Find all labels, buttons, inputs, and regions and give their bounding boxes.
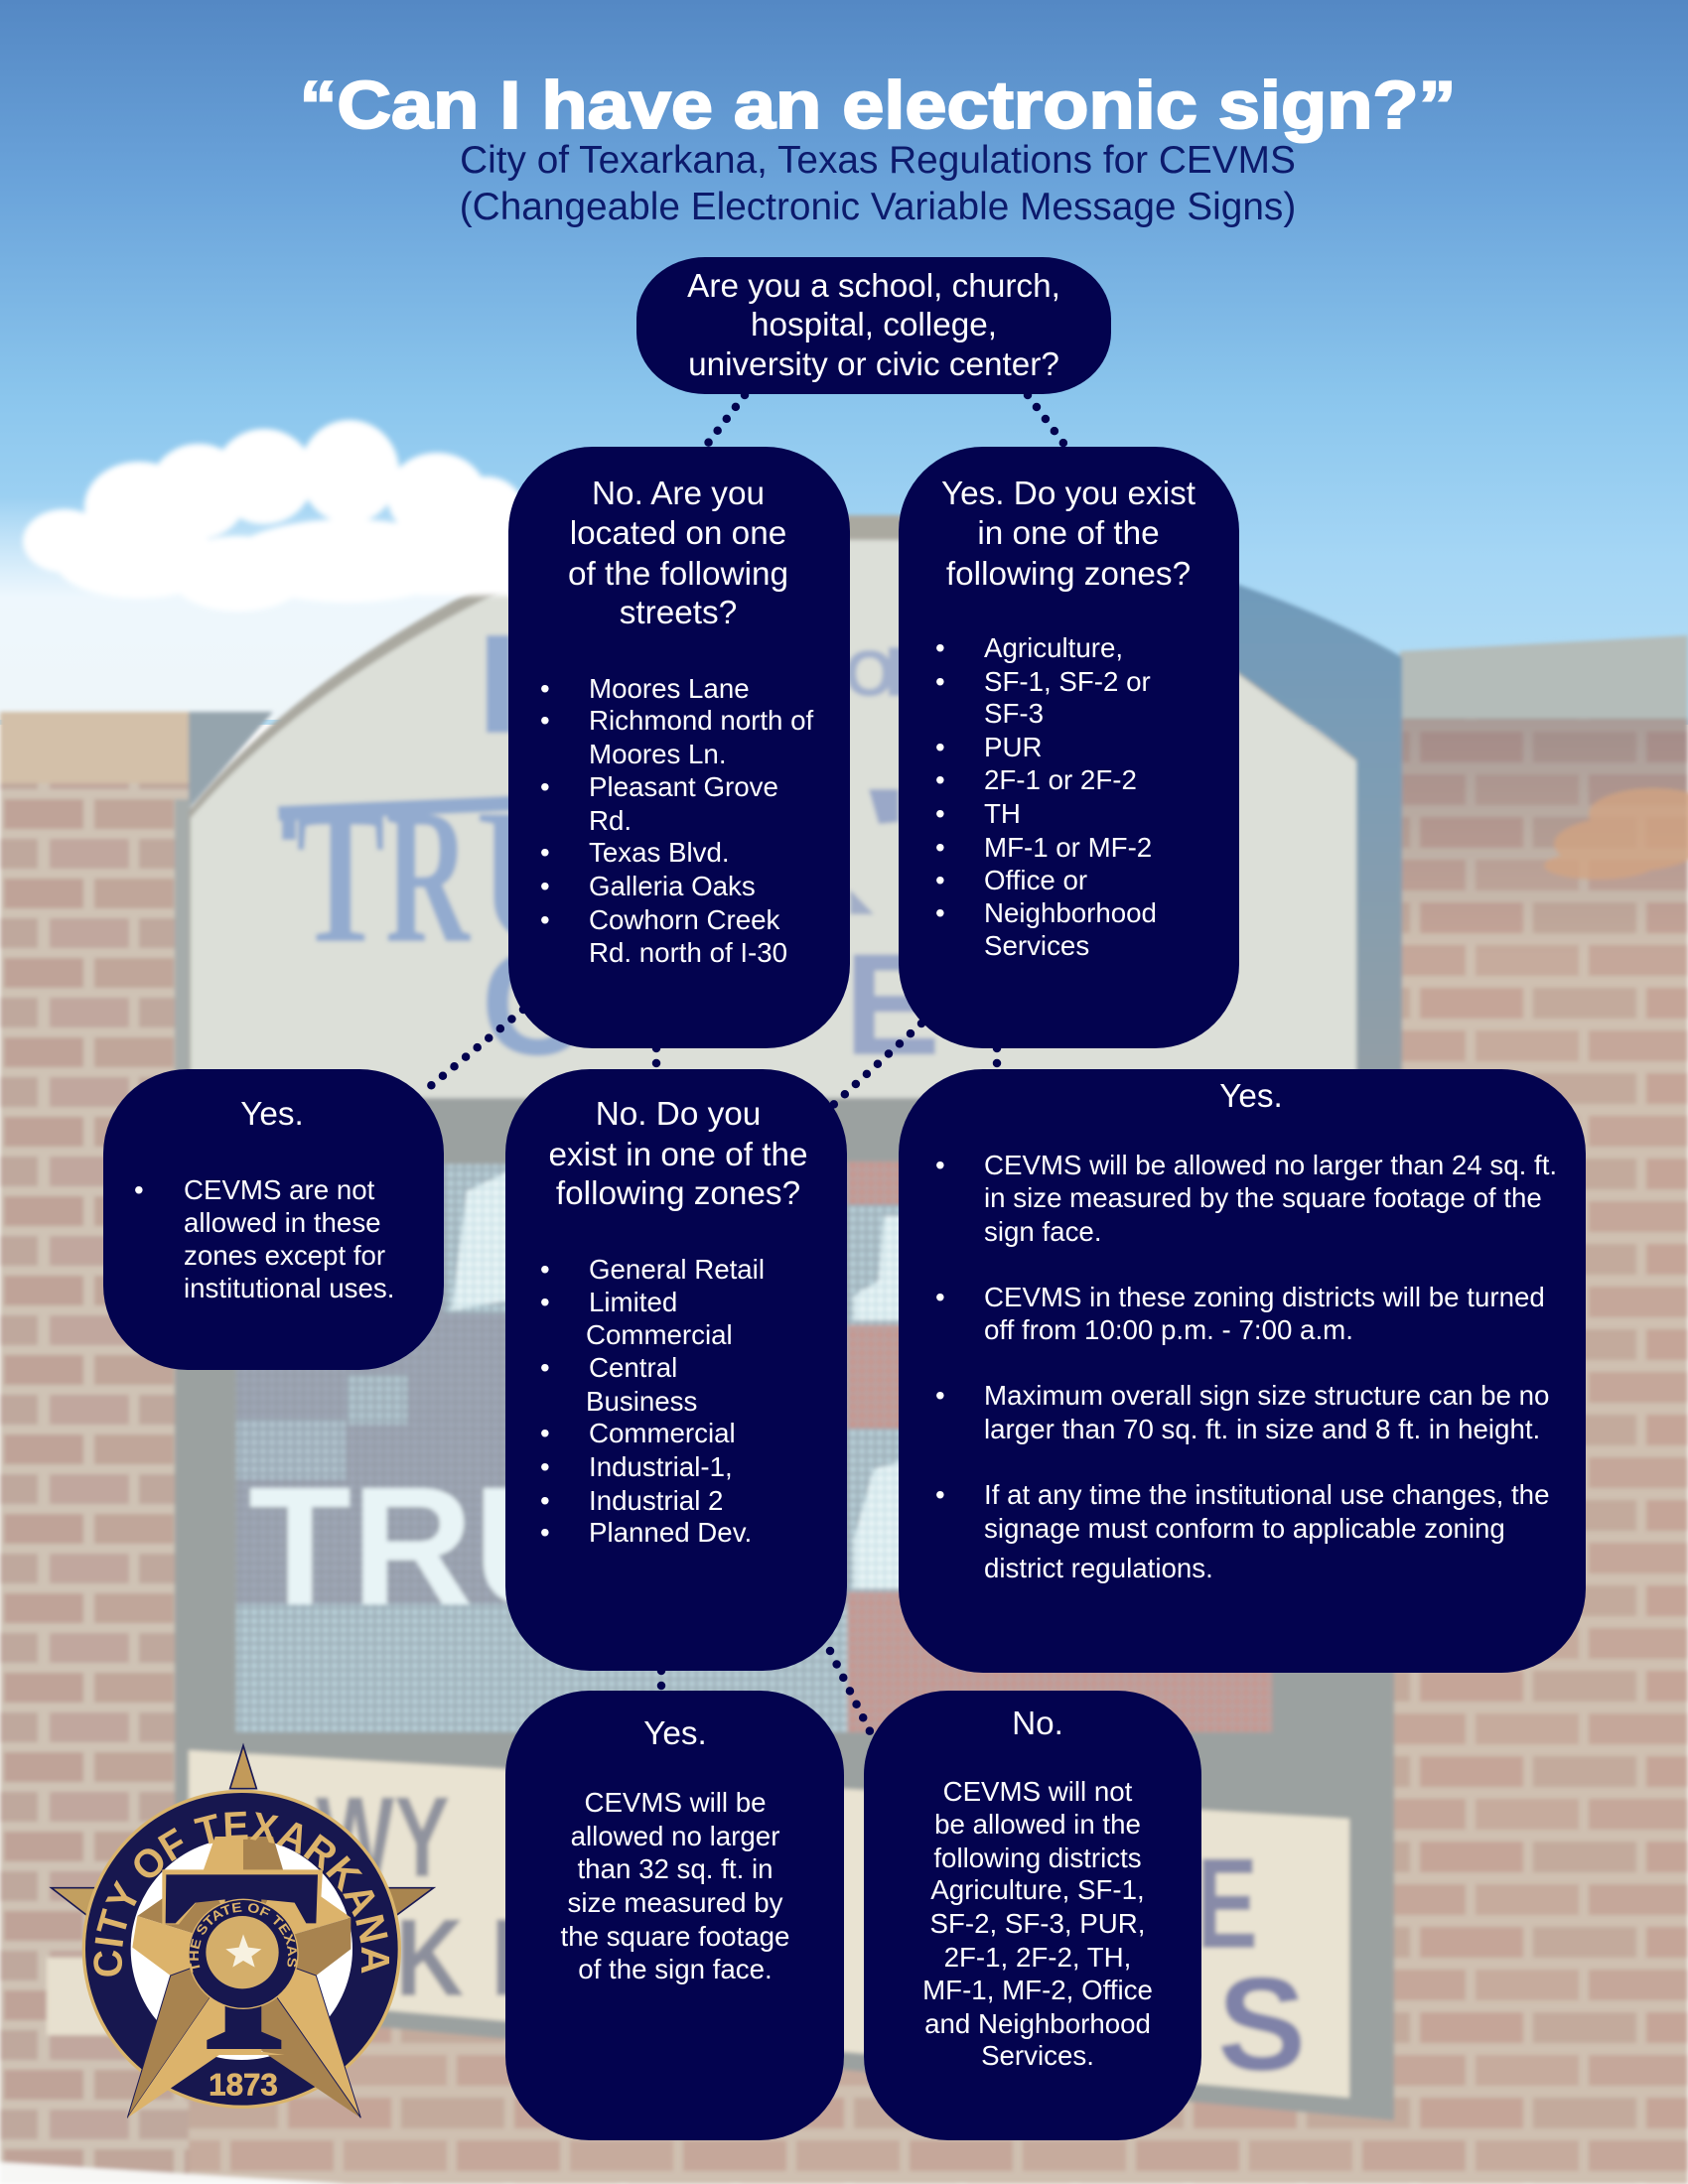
panel: yes, 32 sq ft: of the sign face. [578, 1954, 773, 1984]
panel: yes, not allowed: allowed in these [184, 1207, 381, 1238]
panel: yes, zone question: Yes. Do you exist [941, 476, 1196, 512]
panel: no, not allowed districts: Services. [981, 2040, 1094, 2071]
background photo: sky and sign building: WY [316, 1774, 450, 1901]
panel: yes, 32 sq ft: Yes. [643, 1715, 707, 1752]
panel: yes, institutional conditions: Maximum overall sign size structure can be no [984, 1380, 1549, 1411]
street list: • [540, 837, 550, 868]
residential zone list: • [935, 666, 945, 697]
icon: City of Texarkana seal [49, 1743, 437, 2118]
LED frame [175, 1098, 1394, 2120]
residential zone list: • [935, 832, 945, 863]
panel: no, not allowed districts: 2F-1, 2F-2, TH, [944, 1942, 1131, 1973]
panel: yes, institutional conditions: district regulations. [984, 1553, 1213, 1583]
panel: no, commercial zone question [505, 1069, 847, 1671]
title: “Can I have an electronic sign?” [300, 68, 1456, 143]
panel: yes, institutional conditions: Yes. [1219, 1078, 1283, 1115]
LED screen [236, 1164, 1272, 1732]
panel: yes, zone question [899, 447, 1239, 1048]
panel: yes, 32 sq ft: allowed no larger [571, 1821, 779, 1851]
panel: yes, not allowed: • [134, 1174, 144, 1205]
residential zone list: Agriculture, [984, 632, 1123, 663]
subtitle: City of Texarkana, Texas Regulations for CEVMS [460, 139, 1296, 182]
panel: no, street question [508, 447, 850, 1048]
commercial zone list: Limited [589, 1287, 677, 1317]
commercial zone list: Commercial [586, 1319, 733, 1350]
panel: no, not allowed districts: SF-2, SF-3, PUR, [930, 1908, 1145, 1939]
background photo: sky and sign building: K P [395, 1897, 554, 2019]
commercial zone list: • [540, 1485, 550, 1516]
street list: • [540, 705, 550, 736]
panel: yes, 32 sq ft: size measured by [568, 1887, 783, 1918]
panel: yes, institutional conditions: in size measured by the square footage of the [984, 1182, 1542, 1213]
street list: Galleria Oaks [589, 871, 756, 901]
commercial zone list: • [540, 1451, 550, 1482]
residential zone list: • [935, 764, 945, 795]
connector: streets to commercial zones [652, 1048, 660, 1069]
panel: yes, 32 sq ft: than 32 sq. ft. in [577, 1853, 774, 1884]
panel: no, not allowed districts: CEVMS will not [943, 1776, 1133, 1807]
background photo: sky and sign building: TRU [248, 1452, 595, 1641]
connector: commercial zones to yes [657, 1671, 665, 1691]
panel: yes, institutional conditions: • [935, 1282, 945, 1312]
commercial zone list: Central [589, 1352, 677, 1383]
sign face [189, 515, 1356, 1103]
panel: institutional question: university or civic center? [688, 346, 1059, 383]
lower sign panels [189, 1750, 1349, 2098]
panel: no, not allowed districts: and Neighborhood [924, 2008, 1151, 2039]
street list: Rd. north of I-30 [589, 937, 787, 968]
background photo: sky and sign building: S [1217, 1951, 1306, 2099]
panel: no, street question: located on one [570, 515, 786, 552]
panel: yes, 32 sq ft [505, 1691, 844, 2140]
residential zone list: • [935, 897, 945, 928]
sign lettering [278, 635, 940, 1086]
founding year: 1873 [209, 2068, 278, 2103]
subtitle [460, 139, 1296, 228]
panel: institutional question: Are you a school, church, [687, 268, 1060, 305]
panel: yes, institutional conditions: • [935, 1150, 945, 1180]
panel: yes, not allowed [103, 1069, 444, 1370]
panel: yes, institutional conditions: CEVMS in these zoning districts will be turned [984, 1282, 1545, 1312]
street list: Pleasant Grove [589, 771, 778, 802]
residential zone list: TH [984, 798, 1021, 829]
background photo: sky and sign building: E [1196, 1831, 1258, 1976]
panel: yes, not allowed: CEVMS are not [184, 1174, 375, 1205]
ring text: CITY OF TEXARKANA [93, 1811, 389, 1977]
street list: Richmond north of [589, 705, 814, 736]
panel: yes, not allowed: institutional uses. [184, 1273, 394, 1303]
panel: no, street question: streets? [620, 595, 737, 631]
residential zone list: • [935, 865, 945, 895]
sign lettering: E [844, 923, 940, 1085]
panel: yes, not allowed: Yes. [240, 1096, 304, 1133]
panel: yes, institutional conditions: • [935, 1479, 945, 1510]
panel: yes, institutional conditions [899, 1069, 1586, 1673]
street list: Moores Lane [589, 673, 750, 704]
commercial zone list [540, 1254, 765, 1548]
panel: yes, institutional conditions: signage must conform to applicable zoning [984, 1513, 1505, 1544]
panel: no, street question: No. Are you [592, 476, 765, 512]
street list: • [540, 771, 550, 802]
panel: yes, institutional conditions: sign face. [984, 1216, 1102, 1247]
panel: no, not allowed districts: MF-1, MF-2, Office [922, 1975, 1153, 2005]
residential zone list: SF-1, SF-2 or [984, 666, 1151, 697]
panel: yes, zone question: in one of the [977, 515, 1160, 552]
cloud [23, 420, 526, 612]
commercial zone list: Commercial [589, 1418, 736, 1448]
residential zone list: • [935, 732, 945, 762]
panel: yes, 32 sq ft: CEVMS will be [584, 1787, 767, 1818]
commercial zone list: • [540, 1254, 550, 1285]
street list: Rd. [589, 805, 632, 836]
commercial zone list: • [540, 1352, 550, 1383]
sign lettering: T [296, 769, 385, 984]
street list [540, 673, 814, 968]
residential zone list [935, 632, 1157, 961]
panel: yes, 32 sq ft: the square footage [561, 1921, 789, 1952]
residential zone list: MF-1 or MF-2 [984, 832, 1152, 863]
subtitle: (Changeable Electronic Variable Message Signs) [460, 186, 1296, 228]
panel: yes, institutional conditions: CEVMS will be allowed no larger than 24 sq. ft. [984, 1150, 1557, 1180]
panel: institutional question [636, 257, 1111, 394]
sign lettering: C [481, 919, 588, 1086]
connector: commercial zones to no [830, 1651, 872, 1735]
residential zone list: Office or [984, 865, 1087, 895]
connector: top question to no branch [706, 395, 745, 446]
panel: no, commercial zone question: No. Do you [596, 1096, 761, 1133]
street list: Cowhorn Creek [589, 904, 780, 935]
commercial zone list: General Retail [589, 1254, 765, 1285]
street list: Texas Blvd. [589, 837, 730, 868]
commercial zone list: Planned Dev. [589, 1517, 752, 1548]
residential zone list: PUR [984, 732, 1042, 762]
panel: no, not allowed districts: following districts [933, 1843, 1142, 1873]
blue gable behind sign [189, 712, 273, 809]
panel: institutional question: hospital, college, [751, 307, 997, 343]
commercial zone list: Industrial 2 [589, 1485, 723, 1516]
residential zone list: 2F-1 or 2F-2 [984, 764, 1137, 795]
panel: yes, institutional conditions: • [935, 1380, 945, 1411]
brick walls [0, 779, 189, 2184]
panel: no, not allowed districts: No. [1012, 1706, 1063, 1742]
panel: yes, institutional conditions: larger than 70 sq. ft. in size and 8 ft. in height. [984, 1414, 1540, 1444]
commercial zone list: Business [586, 1386, 697, 1417]
commercial zone list: • [540, 1517, 550, 1548]
panel: no, commercial zone question: exist in one of the [548, 1137, 808, 1173]
panel: no, commercial zone question: following zones? [556, 1175, 800, 1212]
street list: • [540, 871, 550, 901]
panel: yes, institutional conditions: If at any time the institutional use changes, the [984, 1479, 1549, 1510]
commercial zone list: Industrial-1, [589, 1451, 733, 1482]
commercial zone list: • [540, 1418, 550, 1448]
residential zone list: Neighborhood [984, 897, 1157, 928]
panel: no, not allowed districts: Agriculture, SF-1, [930, 1874, 1145, 1905]
orange shape on wall [1544, 788, 1688, 880]
panel: no, street question: of the following [568, 556, 788, 593]
seal text: THE STATE OF TEXAS [189, 1902, 297, 1973]
residential zone list: • [935, 632, 945, 663]
residential zone list: • [935, 798, 945, 829]
connector: zones to yes conditions [993, 1048, 1001, 1069]
connector: top question to yes branch [1028, 395, 1065, 446]
sign lettering: U [475, 769, 615, 984]
panel: no, not allowed districts [864, 1691, 1201, 2140]
commercial zone list: • [540, 1287, 550, 1317]
connector: streets to not allowed [422, 1010, 523, 1093]
connector: zones to commercial zones [831, 1024, 921, 1107]
street list: • [540, 904, 550, 935]
panel: yes, institutional conditions: off from 10:00 p.m. - 7:00 a.m. [984, 1314, 1353, 1345]
panel: yes, zone question: following zones? [946, 556, 1191, 593]
street list: • [540, 673, 550, 704]
background photo: sky and sign building: O [844, 636, 895, 710]
residential zone list: Services [984, 930, 1089, 961]
residential zone list: SF-3 [984, 698, 1044, 729]
panel: yes, not allowed: zones except for [184, 1240, 385, 1271]
panel: no, not allowed districts: be allowed in the [934, 1809, 1141, 1840]
street list: Moores Ln. [589, 739, 727, 769]
sign lettering: R [385, 769, 471, 984]
